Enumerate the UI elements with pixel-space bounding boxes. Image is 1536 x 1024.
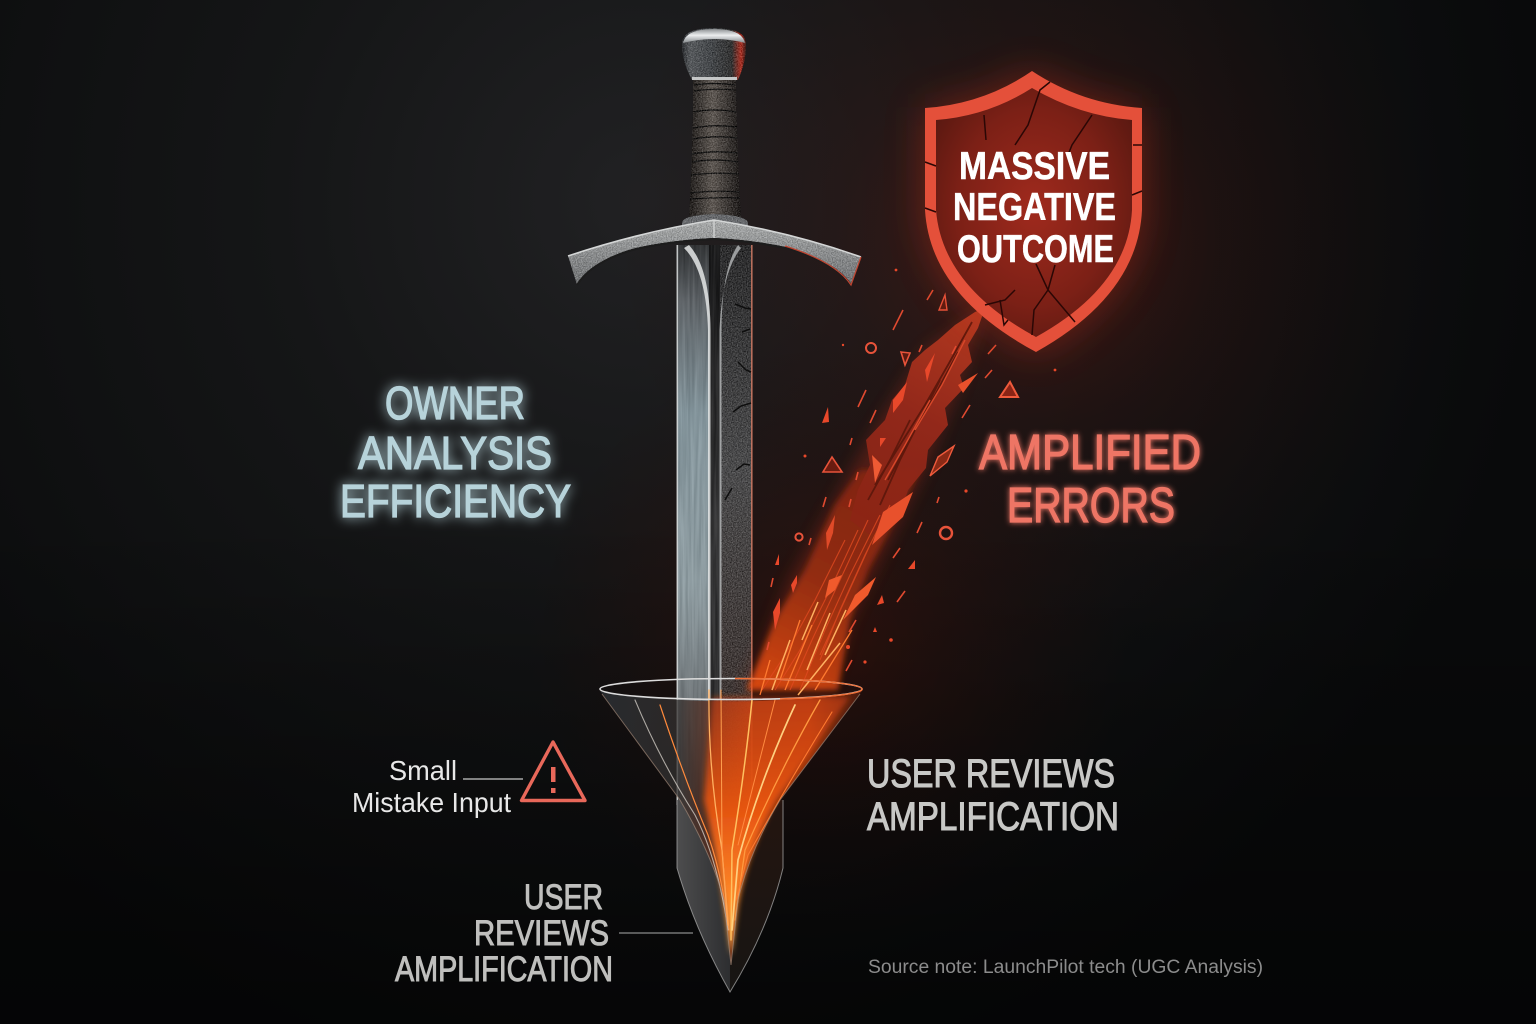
heading: owner analysis efficiency: EFFICIENCY (340, 475, 571, 527)
shield label (953, 145, 1116, 271)
shield label: OUTCOME (957, 228, 1114, 271)
icon: warning triangle (522, 742, 585, 800)
funnel rim (600, 678, 862, 700)
label: user reviews amplification lower (395, 878, 693, 989)
sword pommel (682, 28, 746, 80)
shield label: MASSIVE (959, 145, 1110, 188)
label: small mistake input: Small (389, 755, 457, 786)
heading: amplified errors (979, 426, 1201, 533)
heading: owner analysis efficiency (340, 377, 571, 527)
heading: amplified errors: ERRORS (1007, 479, 1175, 533)
heading: owner analysis efficiency: ANALYSIS (358, 427, 552, 479)
shield label: NEGATIVE (953, 186, 1116, 229)
shield cracks (925, 82, 1142, 335)
heading: owner analysis efficiency: OWNER (385, 377, 525, 429)
label: small mistake input: Mistake Input (352, 787, 511, 818)
label: user reviews amplification lower: REVIEWS (474, 914, 609, 953)
red shard stream (745, 308, 985, 695)
label: small mistake input (352, 755, 523, 818)
lower blade tip (677, 800, 783, 992)
label: user reviews amplification lower: AMPLIFICATION (395, 950, 613, 989)
stream striations (760, 322, 972, 695)
label: user reviews amplification right: AMPLIFICATION (867, 795, 1119, 839)
sword illustration (568, 28, 861, 805)
sword grip (689, 80, 741, 218)
sword blade upper (676, 245, 753, 805)
funnel energy lines (635, 690, 832, 940)
shard fragments (767, 269, 1056, 671)
callout: massive negative outcome shield (925, 71, 1142, 352)
shield inner (936, 88, 1132, 337)
label: user reviews amplification right: USER REVIEWS (867, 752, 1115, 796)
amplification funnel (600, 678, 862, 965)
source note: Source note: LaunchPilot tech (UGC Analysis) (868, 957, 1263, 978)
shield outer (925, 71, 1142, 352)
label: user reviews amplification right (867, 752, 1119, 839)
sword crossguard (568, 214, 861, 285)
heading: amplified errors: AMPLIFIED (979, 426, 1201, 480)
label: user reviews amplification lower: USER (524, 878, 603, 917)
